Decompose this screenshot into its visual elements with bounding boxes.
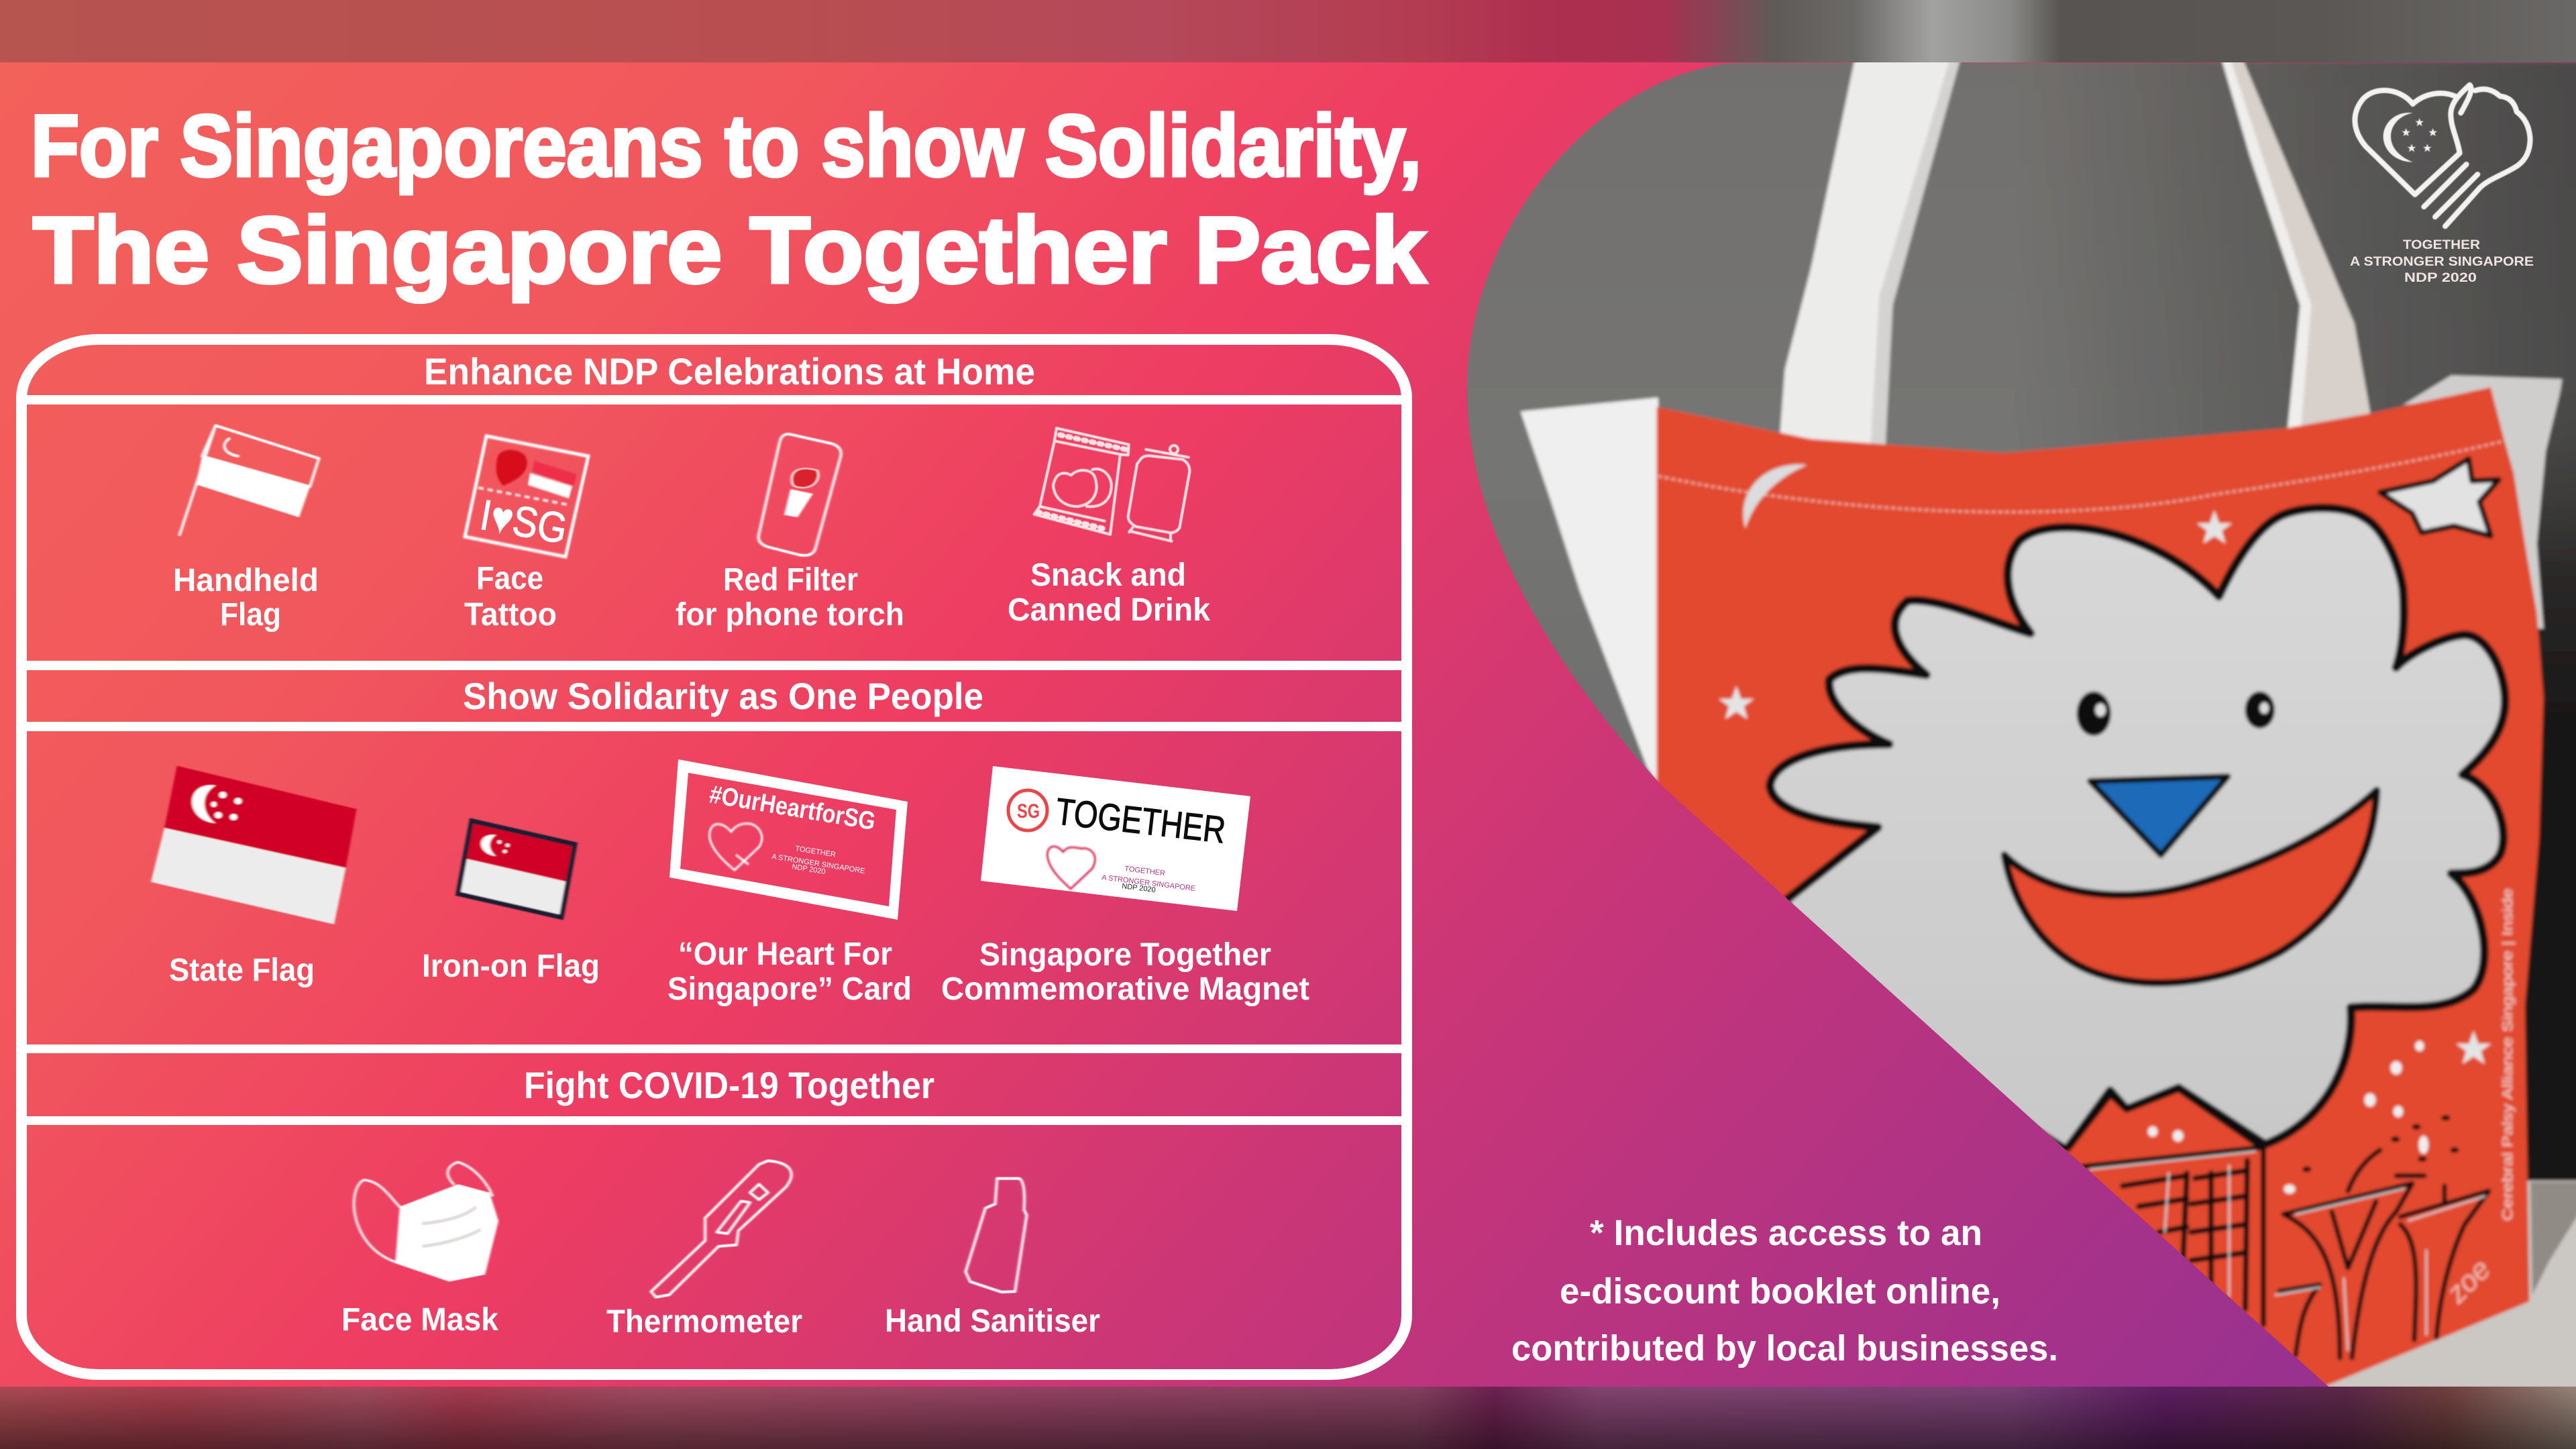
note: e-discount booklet: * Includes access to an <box>1590 1213 1982 1253</box>
crescent <box>1743 464 1807 529</box>
roof outline <box>2066 1088 2259 1150</box>
icon: Singapore Together magnet: NDP 2020 <box>1122 882 1156 894</box>
label: Face Tattoo <box>464 561 557 633</box>
icon: hand sanitiser bottle <box>965 1179 1026 1292</box>
logo caption: A STRONGER SINGAPORE <box>2350 255 2534 269</box>
label: Thermometer: Thermometer <box>606 1304 802 1340</box>
building lines <box>2082 1147 2263 1325</box>
label: Iron-on Flag: Iron-on Flag <box>422 949 600 984</box>
icon: snack and canned drink <box>1034 428 1189 541</box>
dark area right of the bag <box>2523 440 2576 1181</box>
note: e-discount booklet: e-discount booklet online, <box>1560 1271 2000 1311</box>
label: Handheld Flag: Handheld <box>173 563 319 598</box>
icon: Singapore Together magnet <box>981 766 1250 911</box>
icon: phone with red filter torch <box>759 434 841 555</box>
note: e-discount booklet <box>1511 1213 2058 1368</box>
logo caption <box>2350 238 2534 285</box>
eyes <box>2077 692 2275 736</box>
icon: state flag <box>151 766 357 924</box>
heart and fist outline <box>2355 85 2530 226</box>
right gusset <box>2403 375 2562 629</box>
merlion cloud face <box>1770 508 2505 1150</box>
icon: face mask <box>354 1162 498 1281</box>
icon: Singapore Together magnet: SG <box>1017 800 1040 822</box>
nose <box>2090 777 2228 855</box>
logo: NDP heart and fist <box>2355 85 2530 226</box>
large star <box>2380 459 2499 536</box>
panel frame with section dividers <box>20 339 1409 1375</box>
left gusset <box>1520 398 1666 795</box>
icon: Our Heart For Singapore card: #OurHeartforSG <box>708 780 877 836</box>
vertical bag credit: Cerebral Palsy Alliance Singapore | Inside <box>2500 888 2516 1221</box>
icon: Singapore Together magnet: TOGETHER <box>1124 865 1166 877</box>
label: Singapore Together Commemorative Magnet: Singapore Together <box>979 937 1271 973</box>
label: Face Tattoo: Tattoo <box>464 597 557 633</box>
label: Handheld Flag: Flag <box>220 597 281 633</box>
stitching <box>1658 441 2504 512</box>
icon: Singapore Together magnet: A STRONGER SINGAPORE <box>1102 873 1196 893</box>
label: State Flag: State Flag <box>169 953 315 988</box>
mouth <box>2004 790 2377 983</box>
icon: Our Heart For Singapore card <box>669 759 908 920</box>
section heading: Enhance NDP Celebrations at Home: Enhance NDP Celebrations at Home <box>424 350 1035 392</box>
title: The Singapore Together Pack <box>33 197 1426 303</box>
section heading: Show Solidarity as One People: Show Solidarity as One People <box>463 675 983 717</box>
blurred bottom band <box>0 1387 2576 1449</box>
crescent and stars <box>2383 113 2437 162</box>
floor <box>2325 1177 2576 1387</box>
bag body <box>1657 387 2544 1396</box>
label: Face Tattoo: Face <box>476 561 543 596</box>
photo: tote bag <box>1442 56 2576 1396</box>
label: Our Heart For Singapore Card <box>667 936 912 1007</box>
label: Red Filter for phone torch: for phone torch <box>676 597 904 633</box>
label: Snack and Canned Drink <box>1008 557 1210 628</box>
signature: zoe <box>2440 1252 2497 1310</box>
dots <box>2148 1041 2428 1193</box>
logo caption: TOGETHER <box>2403 238 2480 252</box>
blurred top band <box>0 0 2576 62</box>
icon: face tattoo: I♥SG <box>477 490 571 553</box>
logo caption: NDP 2020 <box>2404 271 2477 285</box>
roof fill <box>2066 1088 2263 1314</box>
label: Handheld Flag <box>173 563 319 633</box>
label: Singapore Together Commemorative Magnet: Commemorative Magnet <box>941 971 1309 1007</box>
title <box>31 97 1426 303</box>
icon: Our Heart For Singapore card: TOGETHER <box>795 845 837 859</box>
label: Our Heart For Singapore Card: Singapore” Card <box>667 971 912 1007</box>
icon: thermometer <box>651 1161 792 1297</box>
icon: Our Heart For Singapore card: NDP 2020 <box>792 863 826 876</box>
small stars <box>1719 511 2491 1064</box>
icon: face tattoo <box>465 436 588 557</box>
label: Our Heart For Singapore Card: “Our Heart For <box>678 936 892 972</box>
label: Face Mask: Face Mask <box>341 1302 498 1338</box>
section heading: Fight COVID-19 Together: Fight COVID-19 Together <box>524 1064 934 1106</box>
label: Red Filter for phone torch <box>676 562 904 633</box>
right handle <box>2220 56 2371 430</box>
label: Snack and Canned Drink: Canned Drink <box>1008 592 1210 628</box>
note: e-discount booklet: contributed by local businesses. <box>1511 1328 2058 1368</box>
label: Singapore Together Commemorative Magnet <box>941 937 1309 1007</box>
icon: iron-on flag <box>458 821 575 917</box>
icon: Singapore Together magnet: TOGETHER <box>1054 790 1228 851</box>
left handle <box>1780 56 1962 448</box>
label: Red Filter for phone torch: Red Filter <box>723 562 858 598</box>
building and supertrees drawing <box>2066 1041 2489 1358</box>
label: Snack and Canned Drink: Snack and <box>1030 557 1186 593</box>
icon: handheld flag <box>180 425 319 535</box>
label: Hand Sanitiser: Hand Sanitiser <box>885 1303 1100 1339</box>
title: For Singaporeans to show Solidarity, <box>31 97 1421 195</box>
trees <box>2279 1150 2489 1358</box>
icon: Our Heart For Singapore card: A STRONGER SINGAPORE <box>771 853 865 875</box>
